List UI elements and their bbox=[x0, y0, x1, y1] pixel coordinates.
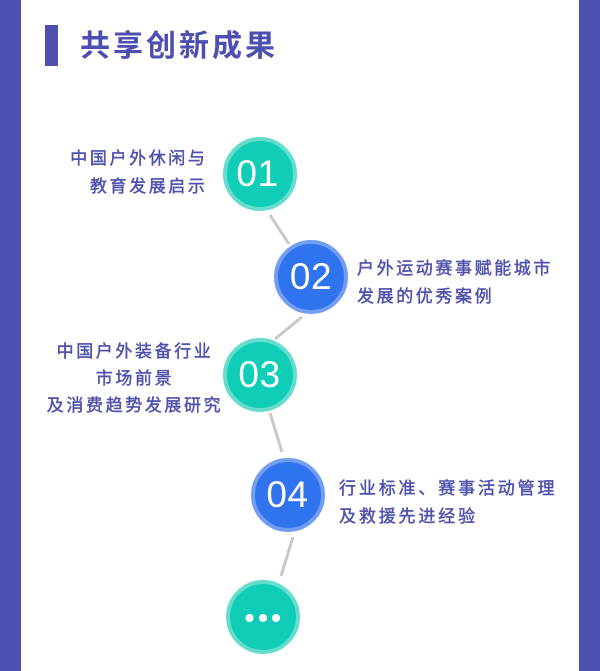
title: 共享创新成果 bbox=[80, 30, 278, 63]
item 04 label bbox=[339, 479, 557, 526]
item 02 label: 发展的优秀案例 bbox=[357, 286, 494, 306]
item 01 label bbox=[70, 149, 208, 196]
item 03 label bbox=[47, 342, 223, 415]
item 02 circle: 02 bbox=[290, 256, 332, 297]
item 01 label: 教育发展启示 bbox=[90, 176, 208, 196]
item 02 label bbox=[357, 259, 553, 306]
item 01 label: 中国户外休闲与 bbox=[70, 149, 208, 168]
more items circle bbox=[226, 580, 300, 654]
item 02 circle bbox=[274, 240, 348, 314]
item 04 circle bbox=[250, 458, 324, 532]
right side band bbox=[579, 0, 600, 671]
item 01 circle: 01 bbox=[236, 153, 279, 194]
item 04 circle: 04 bbox=[266, 474, 309, 515]
item 01 circle bbox=[222, 137, 296, 211]
item 03 label: 市场前景 bbox=[96, 369, 174, 388]
item 04 label: 行业标准、赛事活动管理 bbox=[339, 479, 557, 498]
item 03 label: 中国户外装备行业 bbox=[57, 342, 213, 361]
item 03 circle: 03 bbox=[238, 354, 281, 395]
ellipsis dots bbox=[246, 614, 280, 622]
item 02 label: 户外运动赛事赋能城市 bbox=[357, 259, 553, 278]
title accent bar bbox=[45, 25, 58, 66]
left side band bbox=[0, 0, 21, 671]
item 03 label: 及消费趋势发展研究 bbox=[47, 396, 223, 415]
item 04 label: 及救援先进经验 bbox=[339, 506, 478, 526]
item 03 circle bbox=[222, 338, 296, 412]
